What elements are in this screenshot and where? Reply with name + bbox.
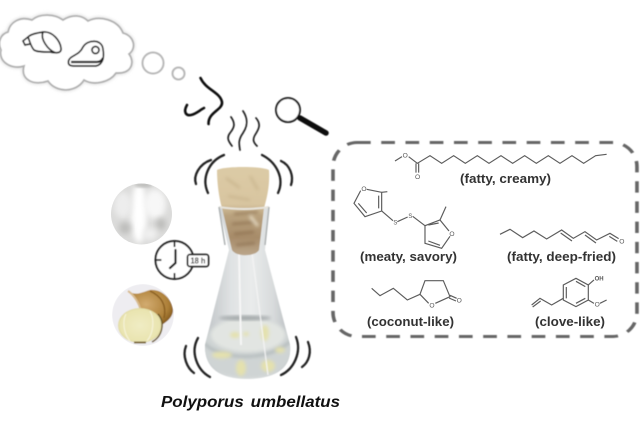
- molecule: eugenol: O: [595, 301, 600, 308]
- molecule: decadienal: O: [619, 238, 624, 245]
- label: clove-like: (clove-like): [535, 314, 605, 329]
- molecule: fatty ester: [395, 152, 607, 181]
- vibration marks: bottom: [185, 337, 310, 377]
- water and contents: [202, 253, 294, 379]
- molecule: eugenol: OH: [595, 276, 604, 282]
- vibration marks: top: [195, 155, 292, 193]
- badge: 18 h: [188, 254, 208, 266]
- cork stopper: [217, 167, 269, 255]
- onion whole: [128, 290, 173, 326]
- onion cut half: [118, 308, 162, 343]
- molecule: disulfide furan: O: [449, 231, 455, 238]
- molecule: disulfide furan: S: [408, 214, 412, 220]
- photo: onion: [112, 284, 174, 346]
- photo: mycelium: [110, 182, 172, 245]
- icon: steak: [68, 41, 103, 66]
- icon: magnifying glass: [276, 98, 326, 133]
- molecule: fatty ester: O: [415, 174, 420, 181]
- molecule: fatty ester: O: [403, 152, 408, 159]
- cloud outline: [0, 15, 134, 90]
- molecule: disulfide furan: S: [393, 220, 397, 226]
- molecule: lactone: O: [429, 302, 435, 309]
- label: coconut-like: (coconut-like): [367, 314, 454, 329]
- label: fatty, creamy: (fatty, creamy): [460, 171, 551, 186]
- icon: clock 18 h: [156, 241, 208, 279]
- thought bubble: [0, 15, 184, 90]
- icon: smell waves: [228, 111, 259, 150]
- flask glass: [205, 207, 290, 379]
- molecule: eugenol: [532, 276, 607, 308]
- dashed border: [333, 142, 637, 336]
- molecule: disulfide furan: O: [361, 186, 367, 193]
- cloud shadow: [0, 15, 134, 90]
- species label: Polyporus umbellatus: [161, 394, 340, 411]
- small thought circles: [142, 52, 164, 74]
- neck rim: [219, 207, 269, 209]
- icon: sausage: [23, 32, 61, 53]
- panel: volatile compounds: [333, 142, 637, 336]
- molecule: decadienal: [500, 229, 624, 245]
- cork texture: [226, 176, 258, 245]
- molecule: disulfide furan: [354, 186, 455, 248]
- icon: nose: [185, 78, 222, 124]
- molecule: lactone: O: [457, 298, 462, 305]
- label: meaty, savory: (meaty, savory): [360, 249, 457, 264]
- molecule: lactone: [372, 281, 462, 309]
- flask: [202, 167, 294, 379]
- icon: clock 18 h: 18 h: [190, 256, 206, 266]
- label: fatty, deep-fried: (fatty, deep-fried): [507, 249, 616, 264]
